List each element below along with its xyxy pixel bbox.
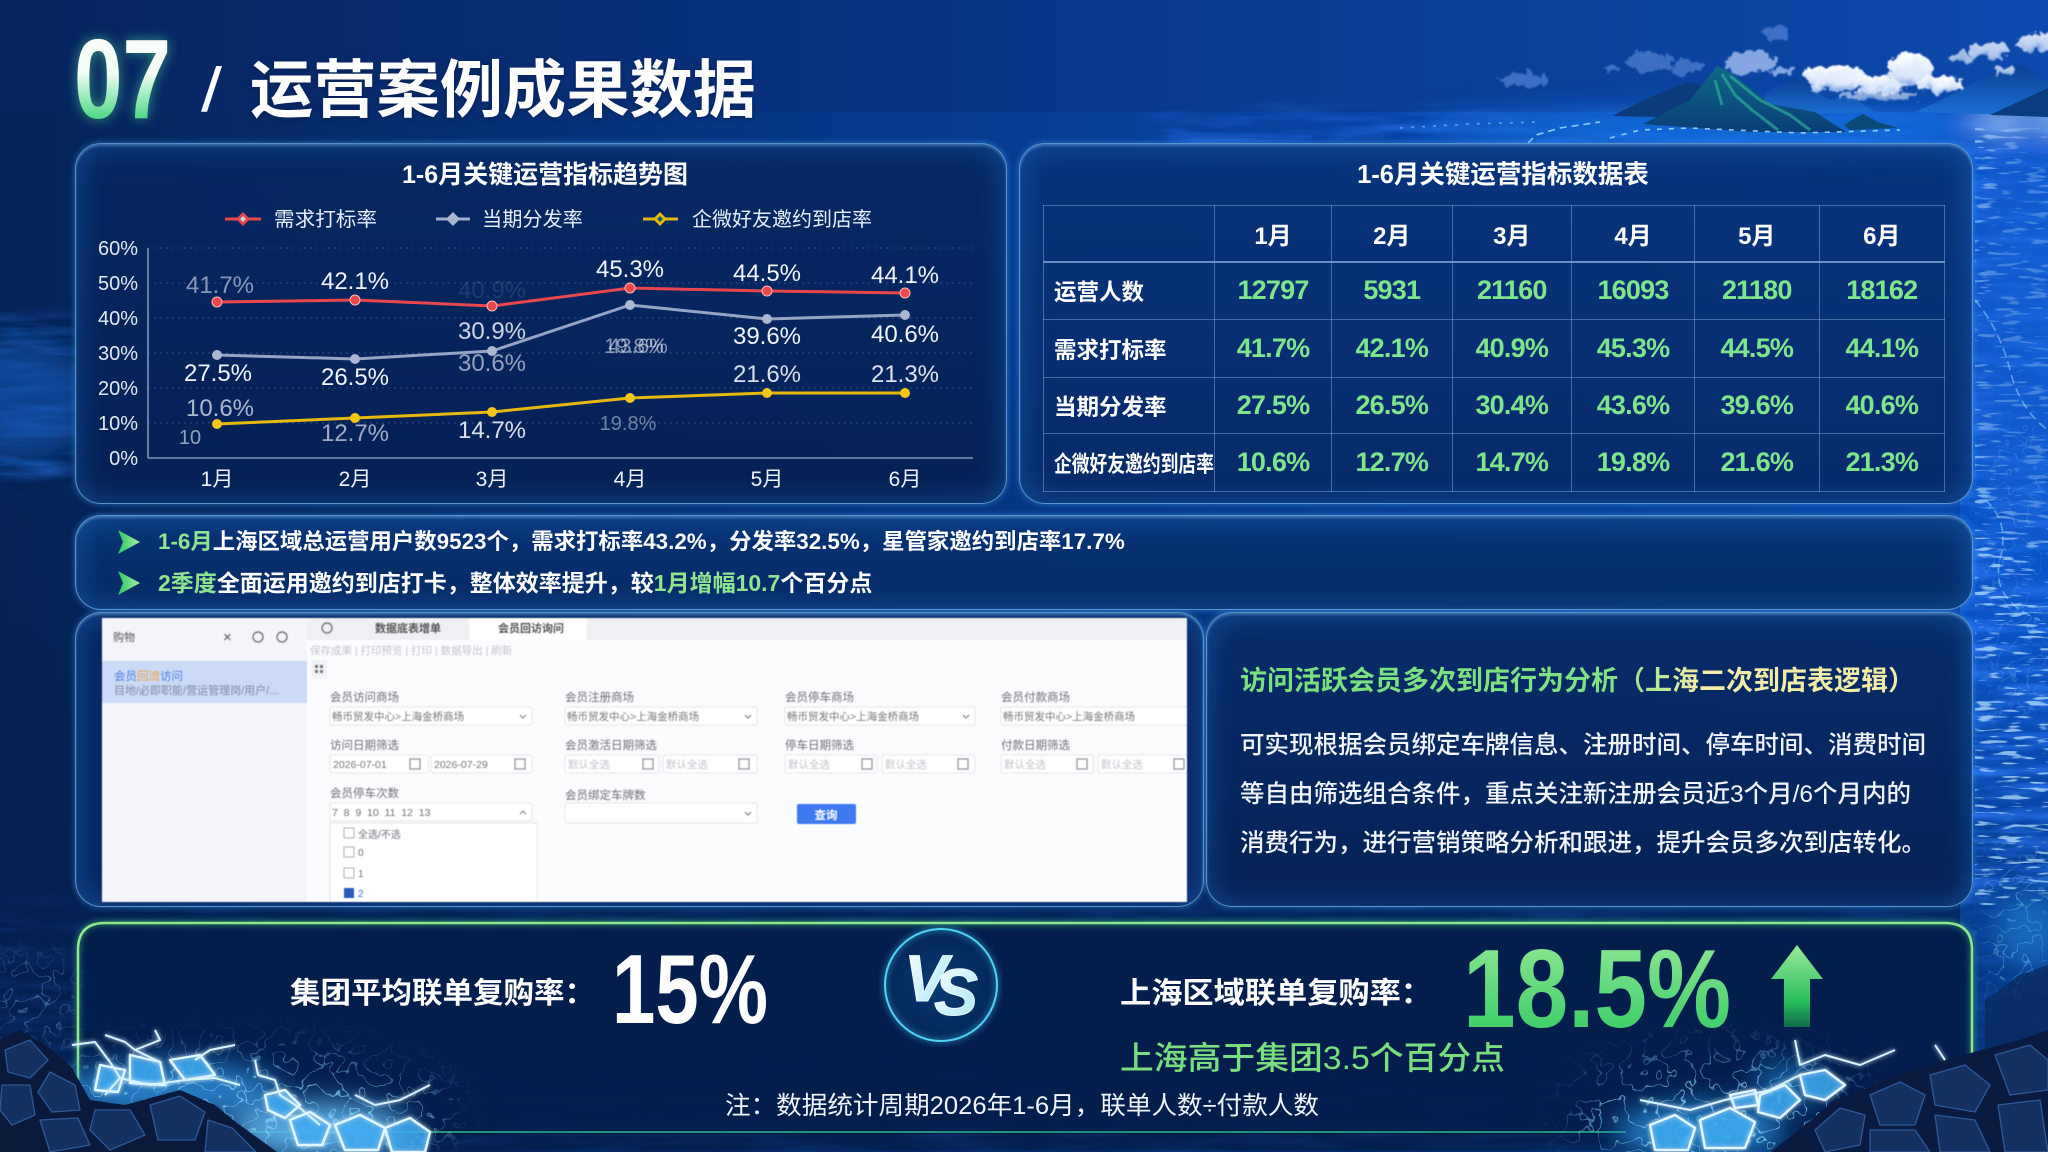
sidebar: × (222, 628, 231, 646)
footnote: 注：数据统计周期2026年1-6月，联单人数÷付款人数 (725, 1092, 1319, 1120)
data labels: 39.6% (732, 322, 801, 350)
series: demand tagging rate (212, 282, 910, 310)
x axis labels: 2月 (338, 468, 371, 490)
data table: 3月 (1493, 223, 1530, 250)
data table: 42.1% (1355, 333, 1428, 363)
data table: 30.4% (1475, 390, 1548, 420)
filter form: 会员激活日期筛选 (564, 738, 657, 752)
analysis body text: 消费行为，进行营销策略分析和跟进，提升会员多次到店转化。 (1240, 830, 1926, 857)
y axis labels: 30% (97, 342, 138, 364)
filter form: 会员停车商场 (784, 690, 854, 704)
screenshot: member query form (101, 617, 1188, 903)
rocks: bottom left (0, 1030, 277, 1152)
sidebar: 购物 (112, 630, 134, 644)
group average label: 集团平均联单复购率： (290, 977, 595, 1010)
filter form: 会员付款商场 (1000, 690, 1070, 704)
y axis labels: 40% (97, 308, 138, 330)
panel: key takeaways (75, 515, 1973, 610)
data table: 27.5% (1237, 390, 1309, 420)
Shanghai label: 上海区域联单复购率： (1120, 977, 1432, 1010)
filter form: 全选/不选 (358, 828, 400, 840)
analysis heading: 访问活跃会员多次到店行为分析（上海二次到店表逻辑） (1240, 666, 1915, 696)
panel border (78, 923, 1972, 1132)
data labels: 44.5% (732, 260, 801, 286)
shoreline lights (1400, 122, 2048, 620)
rocks: bottom right (1771, 1030, 2048, 1152)
foam cells (95, 1055, 1845, 1152)
filter form: 会员注册商场 (564, 690, 634, 704)
legend (224, 208, 872, 230)
x axis labels: 3月 (475, 468, 508, 490)
filter form: 畅币贸发中心>上海金桥商场 (786, 710, 919, 722)
data table: 4月 (1614, 223, 1652, 250)
filter form: 默认全选 (884, 758, 927, 770)
filter form: 会员访问商场 (330, 690, 398, 704)
data table: 21.3% (1845, 447, 1918, 477)
data table: 12.7% (1355, 447, 1428, 477)
legend: 企微好友邀约到店率 (692, 208, 872, 230)
data labels: 21.3% (870, 360, 939, 388)
tab bar: 数据底表增单 (374, 620, 440, 634)
data labels: 30.9% (457, 318, 526, 344)
title slash: / (201, 56, 223, 125)
analysis body text: 可实现根据会员绑定车牌信息、注册时间、停车时间、消费时间 (1240, 732, 1926, 759)
takeaway line 1: 1-6月上海区域总运营用户数9523个，需求打标率43.2%，分发率32.5%，星管家邀约到店率17.7% (158, 529, 1125, 554)
filter form: 7 8 9 10 11 12 13 (332, 806, 430, 818)
x axis labels: 1月 (200, 468, 233, 490)
tab bar: 保存成果 | 打印预览 | 打印 | 数据导出 | 刷新 (310, 644, 512, 656)
data table: 21180 (1722, 275, 1792, 305)
filter form: 付款日期筛选 (1000, 738, 1070, 752)
data table (1043, 205, 1945, 492)
data labels: 10 (178, 426, 201, 448)
data labels: 27.5% (183, 360, 252, 386)
panel: trend chart (75, 143, 1007, 504)
VS badge: S (934, 955, 978, 1029)
panel: behaviour analysis (1206, 612, 1973, 907)
page title (70, 25, 756, 411)
icon: up arrow (1771, 945, 1823, 1027)
x axis labels (200, 468, 921, 490)
data table: 40.9% (1475, 333, 1548, 363)
analysis body text: 等自由筛选组合条件，重点关注新注册会员近3个月/6个月内的 (1240, 781, 1911, 808)
data table: 43.6% (1597, 390, 1669, 420)
group average value: 15% (612, 934, 768, 1044)
data table: 16093 (1597, 275, 1669, 305)
sidebar (102, 618, 306, 902)
filter form: 2 (358, 888, 364, 900)
legend: 需求打标率 (274, 208, 376, 230)
data table: 44.5% (1720, 333, 1793, 363)
data table: 45.3% (1597, 333, 1669, 363)
data table: 当期分发率 (1054, 394, 1167, 420)
data labels: 42.1% (320, 268, 389, 294)
table heading: 1-6月关键运营指标数据表 (1357, 161, 1649, 189)
data table: 41.7% (1237, 333, 1309, 363)
filter form: 畅币贸发中心>上海金桥商场 (566, 710, 699, 722)
crackling foam network (0, 411, 2048, 1152)
filter form: 2026-07-01 (332, 758, 386, 770)
line chart (97, 160, 973, 490)
data table: 14.7% (1475, 447, 1548, 477)
filter form: 默认全选 (1004, 758, 1046, 770)
filter form: 畅币贸发中心>上海金桥商场 (1002, 710, 1135, 722)
y axis labels: 0% (109, 448, 138, 470)
data labels: 30.6% (457, 350, 526, 376)
query button (796, 804, 856, 824)
y axis labels: 20% (97, 378, 138, 400)
data labels: 10.6% (185, 394, 254, 422)
data table: 运营人数 (1054, 280, 1144, 305)
bright horizon glow (0, 108, 2048, 550)
filter form: 访问日期筛选 (330, 738, 399, 752)
surf glow (60, 894, 2048, 1152)
distant clouds (1499, 27, 1790, 87)
data labels: 26.5% (320, 364, 389, 390)
series: friend invitation rate (212, 388, 910, 428)
rock stones and facets (0, 1040, 2048, 1152)
y axis labels: 10% (97, 412, 138, 434)
icon: chevron arrows (118, 530, 140, 595)
filter form: 畅币贸发中心>上海金桥商场 (332, 710, 464, 722)
difference callout: 上海高于集团3.5个百分点 (1120, 1040, 1505, 1076)
data labels: 43.6% (608, 334, 667, 358)
filter form: 默认全选 (666, 758, 708, 770)
data table: 2月 (1373, 223, 1410, 250)
data labels: 41.7% (185, 272, 254, 298)
filter form: 默认全选 (568, 758, 610, 770)
x axis labels: 5月 (750, 468, 783, 490)
data table: 10.6% (1237, 447, 1309, 477)
data labels: 40.9% (457, 276, 526, 304)
panel: repurchase rate comparison (76, 922, 1974, 1134)
x axis labels: 4月 (613, 468, 646, 490)
Shanghai value: 18.5% (1463, 927, 1731, 1051)
data labels: 45.3% (595, 256, 664, 282)
data table: 5月 (1738, 223, 1775, 250)
series: distribution rate (212, 300, 910, 364)
filter form: 0 (358, 848, 364, 858)
data table: 5931 (1363, 275, 1420, 305)
data table: 39.6% (1720, 390, 1793, 420)
data table: 6月 (1863, 223, 1900, 250)
bright clouds (1801, 33, 2048, 100)
foreground shoreline: surf, foam and rocks (0, 411, 2048, 1152)
tab bar: 会员回访询问 (498, 620, 564, 634)
data labels: 40.6% (870, 320, 939, 348)
filter form: 默认全选 (1100, 758, 1143, 770)
filter form: 停车日期筛选 (784, 738, 854, 752)
data table: 18162 (1846, 275, 1917, 305)
data labels: 12.7% (320, 420, 389, 446)
data table: 19.8% (1597, 447, 1669, 477)
data table: 需求打标率 (1054, 338, 1167, 362)
data table: 44.1% (1845, 333, 1918, 363)
sidebar: 目地/必即职能/营运管理岗/用户/... (114, 682, 278, 696)
data labels: 21.6% (732, 360, 801, 388)
takeaway line 2: 2季度全面运用邀约到店打卡，整体效率提升，较1月增幅10.7个百分点 (158, 570, 872, 596)
data labels: 44.1% (870, 262, 939, 288)
tab bar (306, 618, 1186, 678)
far mountains (1612, 65, 2048, 118)
filter form: 默认全选 (788, 758, 830, 770)
query button: 查询 (814, 808, 837, 822)
filter form: 会员停车次数 (330, 786, 399, 800)
VS badge (884, 928, 998, 1042)
data table: 12797 (1237, 275, 1309, 305)
chart title: 1-6月关键运营指标趋势图 (402, 160, 688, 188)
data table: 21.6% (1720, 447, 1793, 477)
grid (148, 248, 972, 422)
data table: 1月 (1254, 223, 1292, 250)
filter form: 1 (358, 868, 364, 880)
data table: 40.6% (1845, 390, 1918, 420)
VS badge: V (904, 941, 953, 1015)
data labels: 19.8% (604, 334, 663, 358)
y axis labels (97, 238, 138, 470)
analysis body text (1240, 732, 1926, 857)
rocks: upper right, dim (1985, 965, 2048, 1050)
data table: 21160 (1477, 275, 1547, 305)
y axis labels: 50% (97, 272, 138, 294)
y axis labels: 60% (97, 238, 138, 260)
filter form: 2026-07-29 (434, 758, 487, 770)
data labels (178, 256, 939, 448)
panel: data table (1019, 143, 1973, 504)
panel: system screenshot (75, 612, 1204, 907)
sky (0, 0, 2048, 116)
title text: 运营案例成果数据 (250, 56, 756, 126)
sidebar: 会员回流访问 (114, 668, 182, 682)
foam veins (72, 1030, 1945, 1125)
front mountain range (1990, 88, 2048, 117)
data table: 企微好友邀约到店率 (1054, 452, 1214, 476)
data labels: 14.7% (457, 416, 526, 444)
filter form (330, 690, 1190, 904)
data table: 26.5% (1355, 390, 1428, 420)
data labels: 19.8% (599, 412, 656, 434)
legend: 当期分发率 (482, 208, 582, 230)
x axis labels: 6月 (888, 468, 921, 490)
axes (148, 248, 972, 458)
main island mountain (1643, 66, 1898, 132)
filter form: 会员绑定车牌数 (564, 788, 645, 802)
